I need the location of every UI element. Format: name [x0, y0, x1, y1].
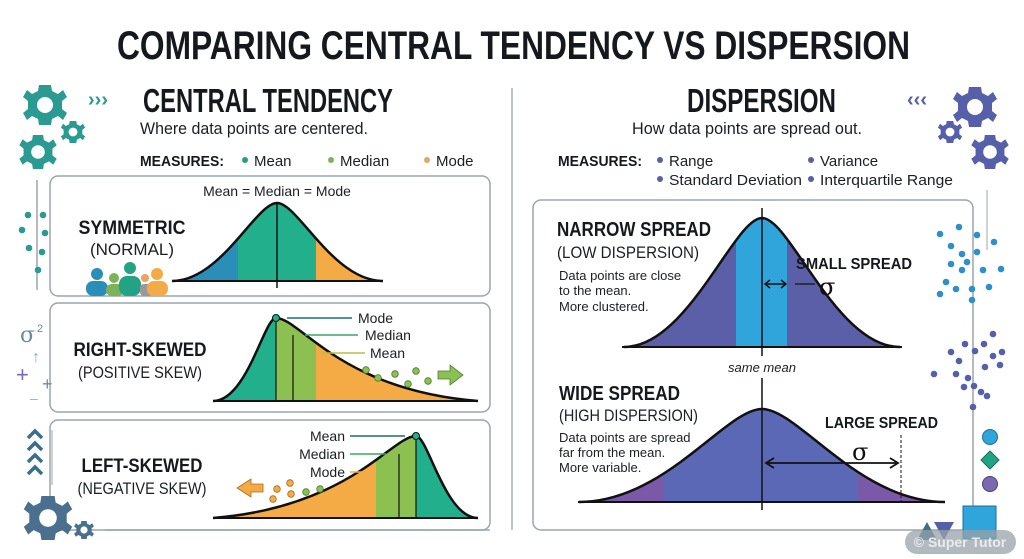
text: narrow spread [557, 219, 711, 314]
chart: wide curve [575, 378, 950, 510]
icon: dots and arrow left [237, 479, 323, 502]
text: wide spread: far from the mean. [559, 445, 665, 460]
panel: right-skewed [50, 303, 490, 412]
text: narrow spread: More clustered. [559, 299, 649, 314]
icon: purple gears top-right [938, 87, 1009, 169]
heading: dispersion: How data points are spread out. [632, 119, 862, 138]
text: narrow spread: to the mean. [559, 283, 631, 298]
label: same mean: same mean [728, 360, 796, 375]
left decorations: σ [20, 323, 35, 348]
measures: dispersion: Interquartile Range [820, 172, 953, 189]
callout: large spread [766, 415, 938, 502]
measures: central tendency: MEASURES: [140, 153, 224, 170]
callout: large spread: LARGE SPREAD [825, 415, 938, 432]
text: wide spread: More variable. [559, 460, 641, 475]
icon: chevrons right: ››› [88, 89, 108, 111]
measures: dispersion: Range [669, 153, 713, 170]
callout: small spread: SMALL SPREAD [796, 256, 912, 273]
panel: symmetric: (NORMAL) [90, 240, 174, 259]
measures: dispersion [558, 153, 953, 189]
icon: shapes [917, 430, 999, 540]
left decorations [16, 180, 490, 530]
measures: dispersion: MEASURES: [558, 153, 642, 170]
labels: mode median mean: Mean [370, 345, 405, 361]
text: wide spread [559, 383, 698, 475]
text: narrow spread: Data points are close [559, 268, 681, 283]
icon: teal gears top-left [19, 85, 85, 169]
center divider [511, 88, 513, 530]
panel: symmetric: Mean = Median = Mode [203, 183, 351, 199]
icon: gears bottom-left [24, 496, 94, 540]
heading: dispersion: DISPERSION [687, 82, 836, 119]
heading: central tendency: Where data points are centered. [140, 119, 368, 138]
right decorations [931, 190, 1005, 510]
chart: normal curve [170, 200, 386, 288]
chart: left-skewed curve [210, 432, 481, 522]
icon: chevrons left: ‹‹‹ [907, 89, 927, 111]
watermark [905, 530, 1016, 554]
labels: mode median mean [287, 310, 411, 361]
left decorations: ↑ [32, 349, 40, 366]
icon: people [86, 262, 168, 296]
panel: symmetric: SYMMETRIC [78, 218, 186, 239]
text: wide spread: Data points are spread [559, 430, 691, 445]
left decorations: + [42, 374, 53, 394]
measures: dispersion: Standard Deviation [669, 172, 802, 189]
panel: left-skewed: (NEGATIVE SKEW) [78, 479, 206, 498]
heading: dispersion [632, 82, 862, 138]
labels: mean median mode: Mean [310, 428, 345, 444]
text: narrow spread: NARROW SPREAD [557, 219, 711, 241]
text: wide spread: (HIGH DISPERSION) [559, 406, 698, 425]
chart: narrow curve [620, 208, 905, 356]
measures: central tendency: Mode [436, 153, 474, 170]
watermark: © Super Tutor [914, 534, 1007, 550]
panel: symmetric [50, 176, 490, 296]
left decorations: + [16, 362, 29, 387]
labels: mode median mean: Mode [358, 310, 393, 326]
callout: small spread: σ [819, 273, 835, 301]
heading: central tendency: CENTRAL TENDENCY [143, 82, 393, 119]
measures: central tendency: Mean [254, 153, 292, 170]
measures: central tendency: Median [340, 153, 389, 170]
left decorations: 2 [37, 323, 43, 335]
text: narrow spread: (LOW DISPERSION) [557, 243, 699, 262]
callout: large spread: σ [852, 438, 868, 466]
measures: dispersion: Variance [820, 153, 878, 170]
panel: right-skewed: (POSITIVE SKEW) [78, 363, 202, 382]
labels: mean median mode [299, 428, 405, 480]
labels: mean median mode: Mode [310, 464, 345, 480]
labels: mean median mode: Median [299, 446, 345, 462]
callout: small spread [765, 256, 912, 301]
text: wide spread: WIDE SPREAD [559, 383, 680, 405]
icon: dots and arrow right [363, 365, 463, 387]
chart: right-skewed curve [210, 314, 481, 405]
measures: central tendency [140, 153, 474, 170]
panel: left-skewed [50, 420, 490, 530]
panel: dispersion comparison [533, 200, 973, 530]
left decorations: – [30, 390, 38, 406]
labels: mode median mean: Median [365, 327, 411, 343]
panel: right-skewed: RIGHT-SKEWED [74, 340, 206, 361]
panel: left-skewed: LEFT-SKEWED [82, 456, 202, 477]
heading: central tendency [140, 82, 393, 138]
